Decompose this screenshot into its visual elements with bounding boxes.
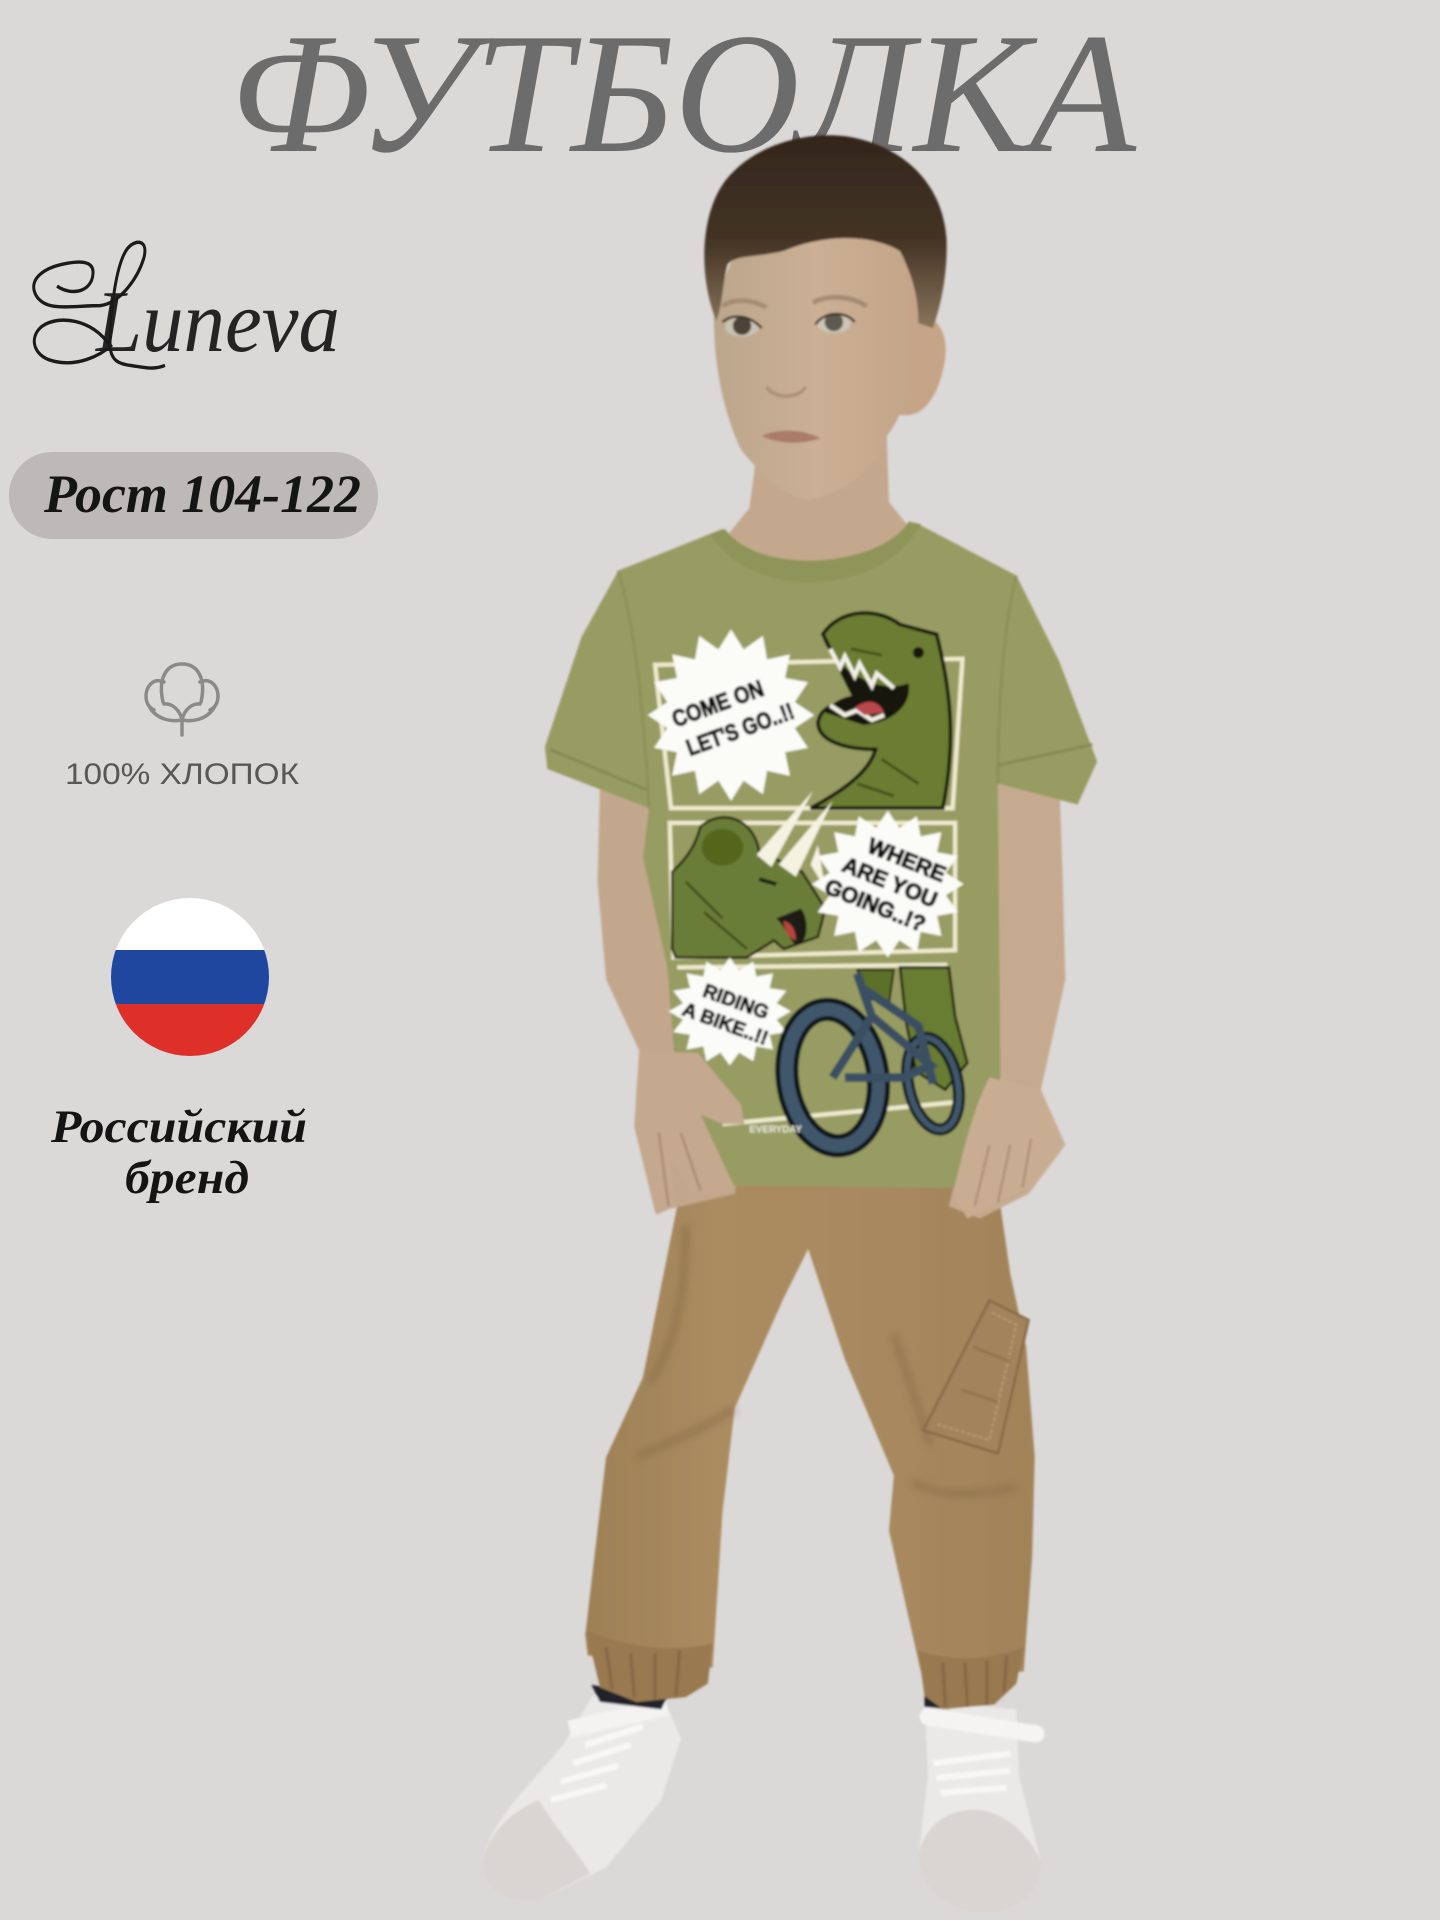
right cuff [918,1647,1024,1709]
left hand fingers [636,1051,744,1215]
title: ФУТБОЛКА [230,0,1137,189]
mouth [762,431,820,443]
speech burst: riding a bike [669,958,791,1065]
comic panel frames [655,659,962,1124]
speech burst: where are you going: GOING..!? [821,874,929,937]
brand origin text: бренд [125,1152,249,1204]
speech burst: where are you going [812,811,964,958]
right arm [949,771,1065,1218]
speech burst: come on [648,629,814,801]
left shoe [482,1685,681,1901]
triceratops [672,791,833,958]
logo: Luneva: Luneva [94,274,340,371]
cotton label: 100% ХЛОПОК [65,758,300,791]
head [704,135,947,500]
speech burst: riding a bike: A BIKE..!! [679,999,771,1050]
bicycle with dinosaur: EVERYDAY [749,1125,802,1136]
size badge: Рост 104-122 [43,464,361,524]
shirt print [648,613,967,1152]
speech burst: come on: COME ON [668,675,767,732]
hair [704,135,947,328]
brand origin text [50,1101,307,1204]
icon: cotton boll [146,664,218,735]
cargo pocket [923,1300,1029,1453]
speech burst: riding a bike: RIDING [700,980,772,1024]
right hand fingers [953,1078,1065,1218]
nose [767,387,806,396]
right eye [816,313,855,333]
pants [585,1163,1035,1709]
left arm [598,784,744,1212]
size badge [9,452,378,539]
brand origin text: Российский [50,1101,307,1153]
left eyebrow [722,301,767,307]
logo: Luneva [34,242,340,371]
speech burst: where are you going: ARE YOU [839,852,941,912]
boy figure [482,135,1097,1913]
t-rex [811,613,951,808]
speech burst: come on: LET'S GO..!! [683,698,797,761]
icon: russian flag [110,898,270,1058]
left eye [722,317,762,337]
right shoe [918,1696,1041,1913]
speech burst: where are you going: WHERE [864,833,949,887]
left cuff [587,1631,713,1702]
bicycle with dinosaur [749,967,967,1152]
t-shirt [545,522,1097,1188]
neck [722,429,909,588]
right ear [896,316,946,415]
right eyebrow [813,297,867,306]
